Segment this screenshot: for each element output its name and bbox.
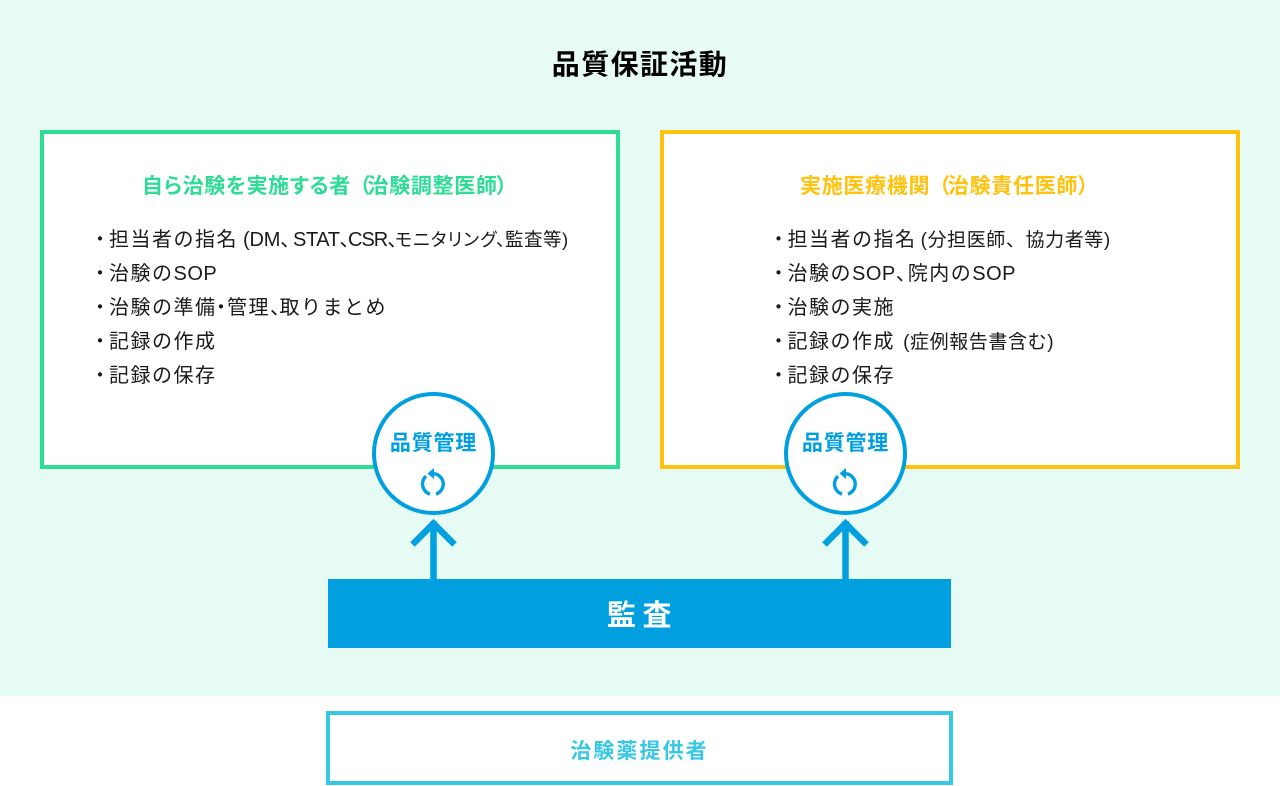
text block: sponsor duties: モニタリング、 bbox=[395, 230, 506, 250]
panel: institution heading: 実施医療機関（治験責任医師） bbox=[800, 175, 1099, 198]
icon: cycle bbox=[420, 468, 445, 496]
audit bar bbox=[328, 579, 951, 648]
circle badge: quality control, institution bbox=[784, 392, 907, 515]
icon: cycle bbox=[832, 468, 857, 496]
arrow: audit to sponsor bbox=[410, 519, 457, 579]
text block: sponsor duties: CSR、 bbox=[348, 229, 406, 251]
text block: sponsor duties: ・記録の作成 bbox=[90, 331, 216, 353]
box: investigational drug provider: 治験薬提供者 bbox=[570, 740, 709, 763]
text block: sponsor duties: ・記録の保存 bbox=[90, 365, 216, 387]
title: 品質保証活動 bbox=[552, 49, 728, 80]
panel: sponsor heading: 自ら治験を実施する者（治験調整医師） bbox=[142, 175, 517, 198]
text block: sponsor duties: ・治験の準備・管理、取りまとめ bbox=[90, 297, 387, 319]
badge label: 品質管理 bbox=[390, 432, 477, 455]
text block: sponsor duties: ・担当者の指名 bbox=[90, 229, 238, 251]
text block: institution duties: ・記録の保存 bbox=[768, 365, 895, 387]
text block: institution duties: ・治験のSOP、院内のSOP bbox=[768, 263, 1016, 285]
text block: institution duties: ・担当者の指名 (分担医師、協力者等) bbox=[768, 229, 1111, 251]
text block: sponsor duties bbox=[90, 229, 569, 387]
arrow: audit to institution bbox=[822, 519, 869, 579]
panel: medical institution bbox=[660, 130, 1240, 469]
badge label: 品質管理 bbox=[802, 432, 889, 455]
text block: sponsor duties: STAT、 bbox=[293, 229, 359, 251]
text block: institution duties: ・記録の作成 (症例報告書含む) bbox=[768, 331, 1054, 353]
box: investigational drug provider bbox=[326, 711, 953, 785]
text block: institution duties: ・治験の実施 bbox=[768, 297, 895, 319]
circle badge: quality control, sponsor bbox=[372, 392, 495, 515]
audit bar: 監査 bbox=[607, 600, 678, 632]
panel: sponsor bbox=[40, 130, 620, 469]
text block: sponsor duties: (DM、 bbox=[243, 229, 300, 251]
text block: sponsor duties: 監査等) bbox=[505, 229, 569, 250]
text block: institution duties bbox=[768, 229, 1111, 387]
text block: sponsor duties: ・治験のSOP bbox=[90, 263, 217, 285]
